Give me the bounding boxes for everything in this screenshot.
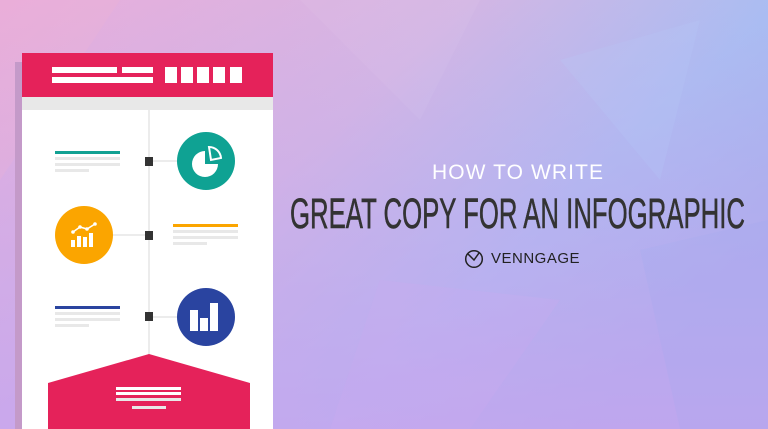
footer pentagon <box>48 354 250 429</box>
logo: venngage: VENNGAGE <box>491 250 580 267</box>
step 2 icon + text <box>55 206 238 264</box>
subtitle: HOW TO WRITE <box>432 161 603 184</box>
infographic mockup panel <box>15 53 273 429</box>
step 1 text + icon <box>55 132 235 190</box>
step 3 text + icon <box>55 288 235 346</box>
header bar <box>22 53 273 97</box>
